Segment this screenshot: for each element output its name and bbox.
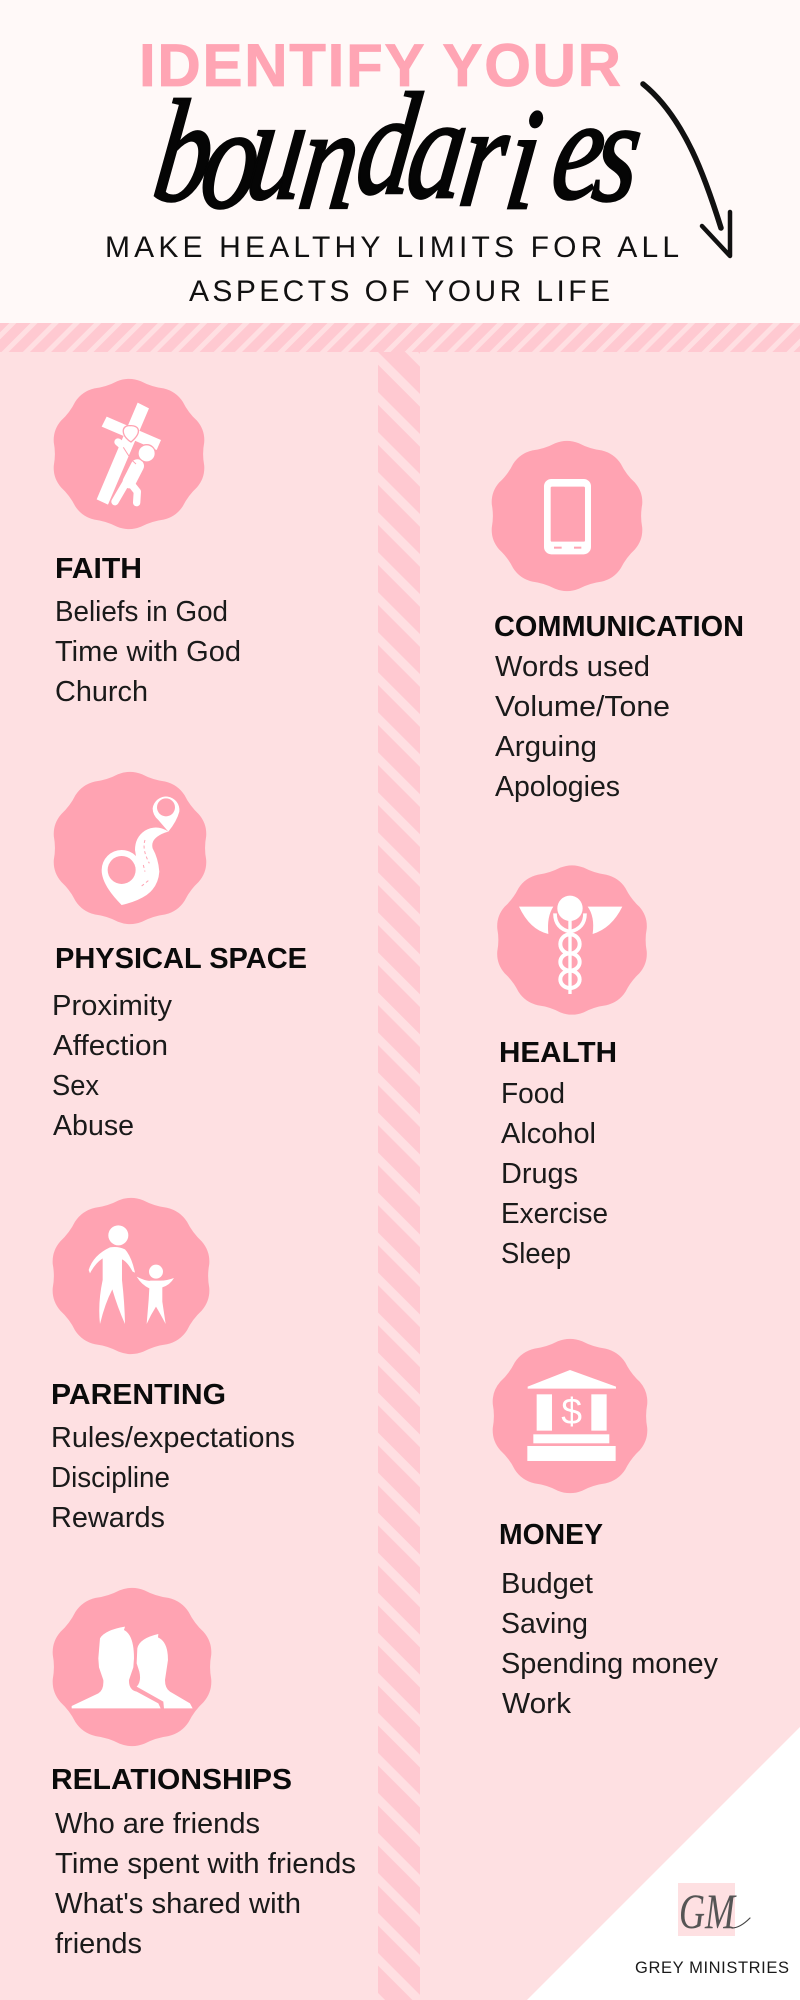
- list: parenting: Rules/expectations: [51, 1422, 295, 1454]
- list: health: Exercise: [501, 1198, 608, 1230]
- heading: money: MONEY: [499, 1519, 603, 1551]
- logo wordmark: GREY MINISTRIES: [635, 1959, 789, 1977]
- list: money: Work: [502, 1688, 572, 1720]
- header background: [0, 0, 800, 323]
- icon: bank badge: [493, 1339, 647, 1493]
- icon: bank badge: $: [561, 1390, 582, 1432]
- list: relationships: Time spent with friends: [55, 1848, 356, 1880]
- list: health: Drugs: [501, 1158, 578, 1190]
- title: boundaries script: boundaries: [144, 65, 653, 240]
- vertical striped divider: [378, 352, 420, 2000]
- list: physical space: Abuse: [53, 1110, 134, 1142]
- heading: relationships: RELATIONSHIPS: [51, 1764, 292, 1796]
- list: faith: Church: [55, 676, 148, 708]
- icon: cross bearer badge: [54, 379, 204, 529]
- list: communication: [495, 651, 670, 803]
- list: relationships: What's shared with: [55, 1888, 301, 1920]
- icon: two people badge: [53, 1588, 211, 1746]
- list: health: Food: [501, 1078, 565, 1110]
- logo: grey ministries: [635, 1883, 789, 1977]
- list: parenting: Rewards: [51, 1502, 165, 1534]
- list: physical space: [52, 990, 172, 1142]
- panel: parenting: [51, 1198, 295, 1534]
- heading: faith: FAITH: [55, 553, 142, 585]
- list: health: [501, 1078, 608, 1270]
- panel: relationships: [51, 1588, 356, 1960]
- heading: parenting: PARENTING: [51, 1379, 226, 1411]
- list: money: Saving: [501, 1608, 588, 1640]
- title: identify your: IDENTIFY YOUR: [139, 32, 621, 99]
- list: physical space: Affection: [53, 1030, 168, 1062]
- list: faith: Beliefs in God: [55, 596, 228, 628]
- list: parenting: Discipline: [51, 1462, 170, 1494]
- panel: faith: [54, 379, 241, 708]
- heading: physical space: PHYSICAL SPACE: [55, 943, 307, 975]
- list: physical space: Proximity: [52, 990, 172, 1022]
- arrow: [643, 84, 730, 256]
- list: money: Spending money: [501, 1648, 718, 1680]
- list: faith: Time with God: [55, 636, 241, 668]
- panel: communication: [492, 441, 744, 803]
- icon: parent and child badge: [53, 1198, 209, 1354]
- list: money: [501, 1568, 718, 1720]
- list: parenting: [51, 1422, 295, 1534]
- icon: caduceus badge: [497, 865, 647, 1015]
- list: health: Alcohol: [501, 1118, 596, 1150]
- list: health: Sleep: [501, 1238, 571, 1270]
- panel: money: [493, 1339, 718, 1720]
- horizontal striped band: [0, 323, 800, 352]
- list: communication: Arguing: [495, 731, 597, 763]
- panel: physical space: [52, 772, 307, 1142]
- subtitle: ASPECTS OF YOUR LIFE: [189, 275, 610, 308]
- white corner triangle: [527, 1727, 800, 2000]
- list: faith: [55, 596, 241, 708]
- panel: health: [497, 865, 647, 1270]
- heading: health: HEALTH: [499, 1037, 617, 1069]
- list: physical space: Sex: [52, 1070, 99, 1102]
- list: money: Budget: [501, 1568, 593, 1600]
- heading: communication: COMMUNICATION: [494, 611, 744, 643]
- subtitle: MAKE HEALTHY LIMITS FOR ALL: [105, 231, 679, 264]
- list: communication: Apologies: [495, 771, 620, 803]
- subtitle: [105, 231, 679, 308]
- list: relationships: [55, 1808, 356, 1960]
- list: relationships: friends: [55, 1928, 142, 1960]
- icon: phone badge: [492, 441, 642, 591]
- list: relationships: Who are friends: [55, 1808, 260, 1840]
- list: communication: Words used: [495, 651, 650, 683]
- list: communication: Volume/Tone: [495, 691, 670, 723]
- logo mark: GM: [679, 1883, 737, 1939]
- icon: route map badge: [54, 772, 206, 924]
